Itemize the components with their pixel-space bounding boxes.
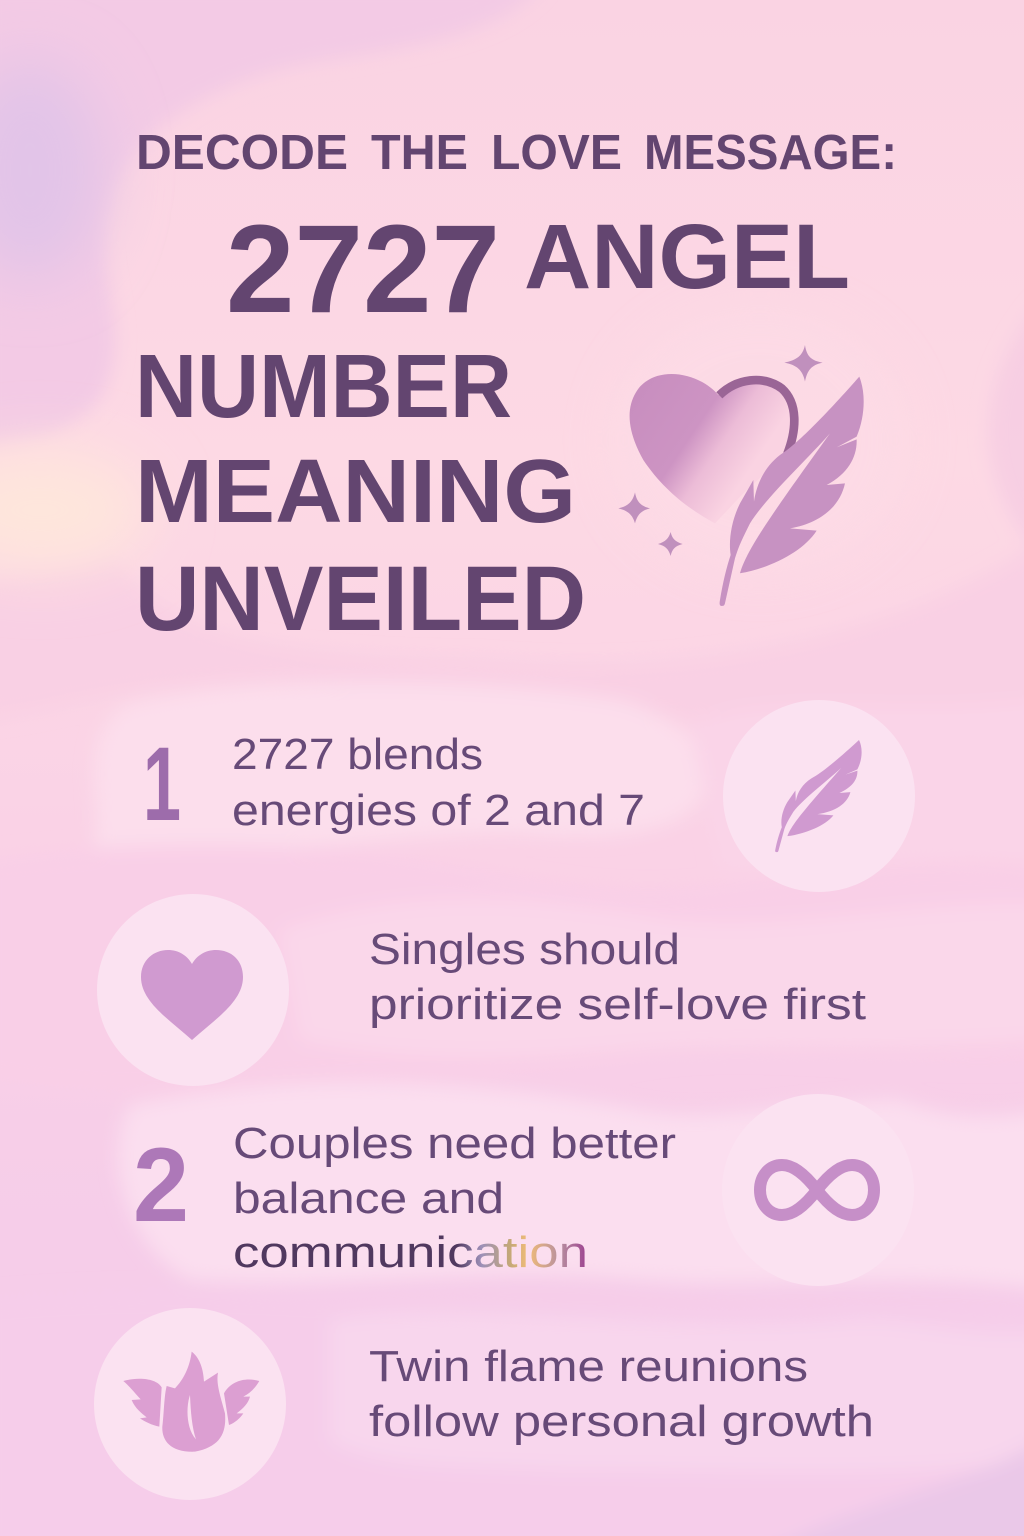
title: 2727 angel number meaning unveiled: NUMBER (135, 337, 512, 437)
heading: decode the love message: DECODE (136, 126, 348, 180)
item: twin flame (94, 1308, 874, 1500)
item 1: blends of energies (143, 700, 915, 892)
icon: sparkles (618, 345, 823, 556)
circle with winged flame icon (94, 1308, 286, 1500)
icon: heart (630, 374, 794, 523)
title: 2727 angel number meaning unveiled: UNVEILED (135, 548, 586, 650)
title: 2727 angel number meaning unveiled: ANGEL (524, 206, 850, 308)
title: 2727 angel number meaning unveiled (135, 200, 850, 650)
text: couples need better balance and: balance and (233, 1174, 504, 1223)
left wing (123, 1379, 162, 1427)
circle with infinity icon (722, 1094, 914, 1286)
text: singles should prioritize self-love first: prioritize self-love first (369, 980, 866, 1029)
heading: decode the love message: MESSAGE: (644, 126, 897, 180)
number 2: 2 (133, 1127, 189, 1244)
circle with heart icon (97, 894, 289, 1086)
title: 2727 angel number meaning unveiled: 2727 (226, 200, 500, 339)
text: 2727 blends: energies of 2 and 7 (232, 786, 645, 835)
item 2: couples balance (133, 1094, 914, 1286)
illustration: heart, feather and sparkles (618, 345, 864, 606)
heading: decode the love message: LOVE (491, 126, 622, 180)
text: twin flame reunions follow personal growth: Twin flame reunions (369, 1342, 808, 1391)
item: singles self-love (97, 894, 866, 1086)
icon: large feather (720, 377, 864, 606)
text: 2727 blends: 2727 blends (232, 730, 483, 779)
text: singles should prioritize self-love first: Singles should (369, 925, 680, 974)
text: couples need better balance and: Couples need better (233, 1119, 676, 1168)
circle with feather icon (723, 700, 915, 892)
text: twin flame reunions follow personal growth: follow personal growth (369, 1397, 874, 1446)
heading: decode the love message: THE (371, 126, 468, 180)
number 1: 1 (143, 726, 181, 843)
right wing (224, 1379, 259, 1425)
title: 2727 angel number meaning unveiled: MEANING (135, 442, 576, 542)
text: communication: communication (233, 1228, 588, 1277)
flame (162, 1352, 225, 1452)
